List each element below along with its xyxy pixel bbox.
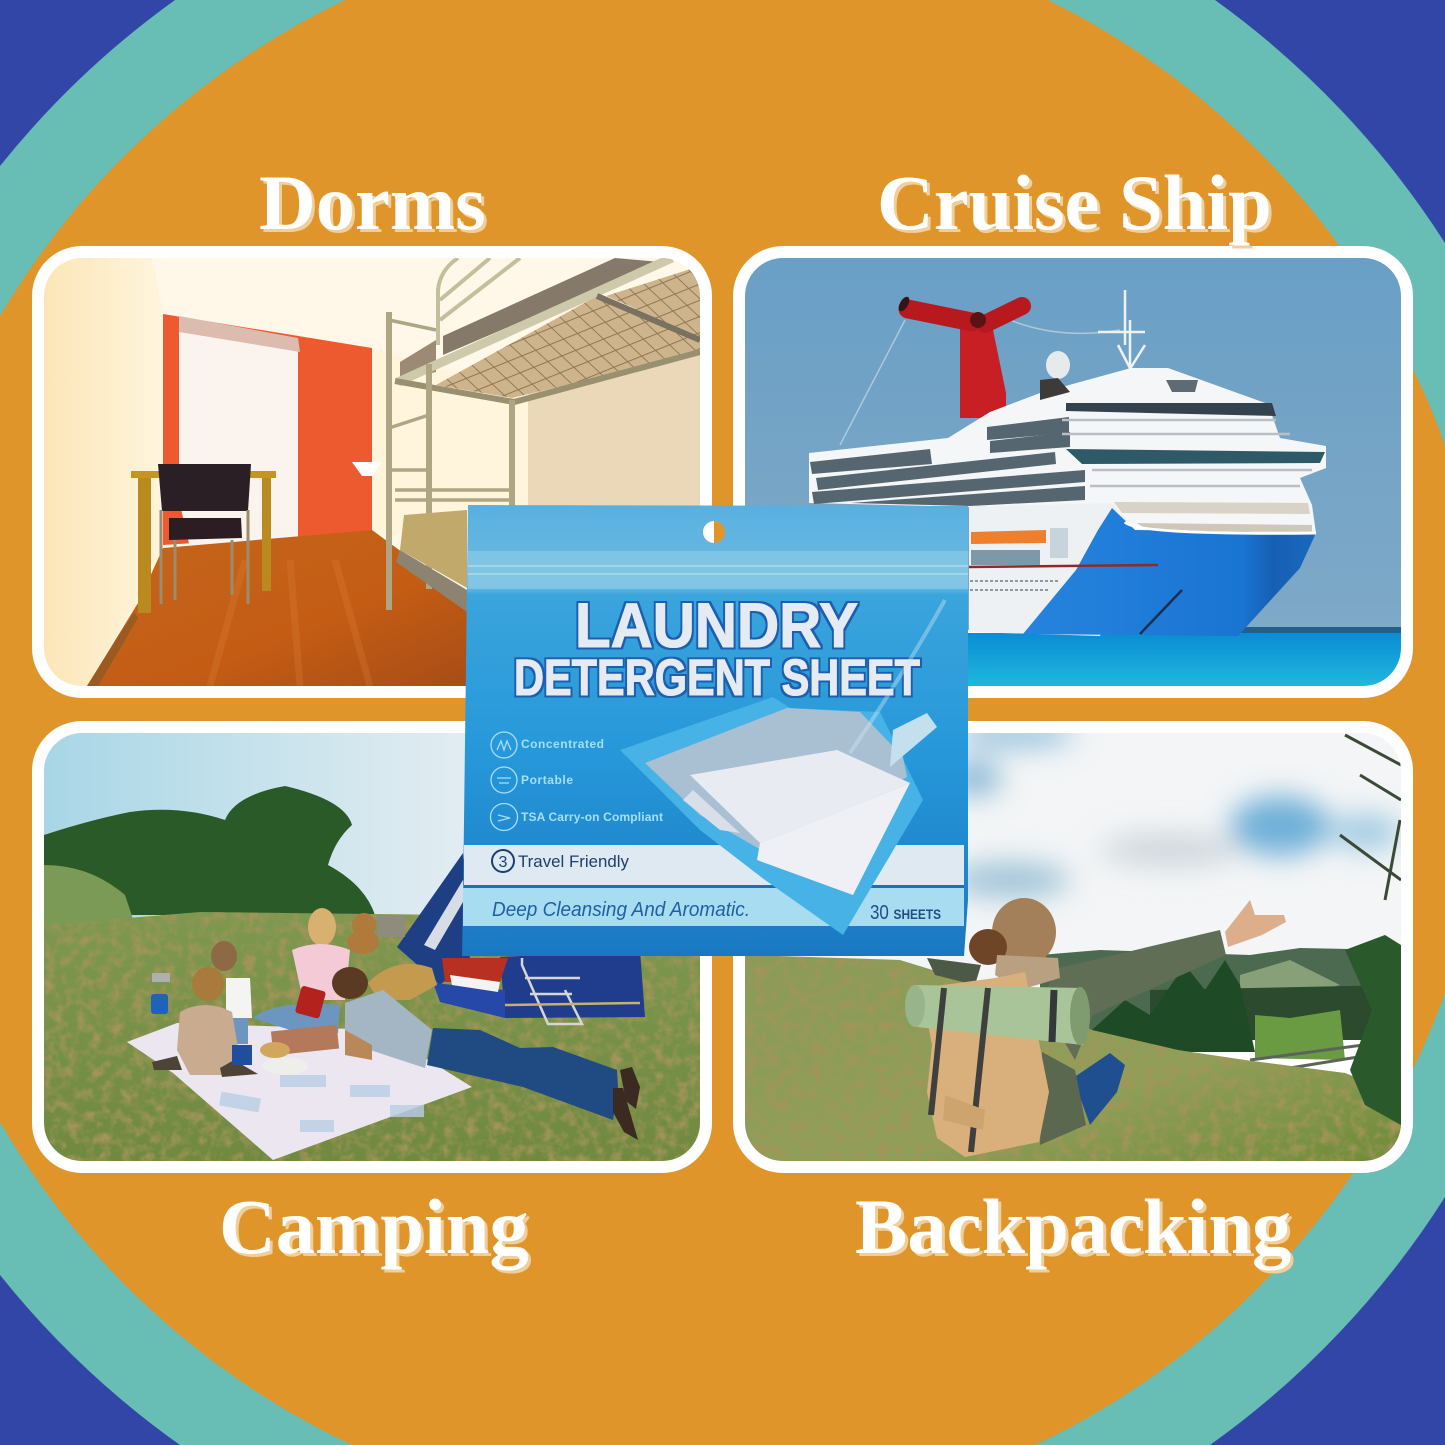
tagline: Deep Cleansing And Aromatic.: [492, 899, 750, 921]
camping stove: [151, 973, 170, 1014]
sky patches: [949, 723, 1401, 898]
bag title: [514, 591, 920, 706]
travel friendly line: [492, 850, 629, 872]
ship: [809, 290, 1326, 636]
feature list: [490, 732, 518, 830]
bunk bed: [389, 258, 700, 612]
product bag: Concentrated: [521, 737, 604, 751]
grass hillside: [745, 955, 1401, 1161]
heading: Camping: Camping: [219, 1183, 529, 1270]
heading: Cruise Ship: Cruise Ship: [877, 159, 1272, 246]
heading: Backpacking: Backpacking: [855, 1183, 1291, 1270]
backpack: [921, 972, 1049, 1157]
ship mast: [1098, 290, 1145, 372]
ship funnel: [897, 295, 1022, 418]
product bag: [462, 505, 968, 956]
tent: [397, 853, 645, 1024]
picnic blanket: [127, 1023, 472, 1160]
table: [131, 471, 276, 613]
product sheet window: [620, 600, 945, 935]
superstructure: [809, 368, 1326, 535]
mountains: [1040, 948, 1362, 1030]
travel friendly line: Travel Friendly: [518, 852, 629, 871]
family: [152, 908, 640, 1140]
grass: [44, 912, 700, 1161]
forest: [1092, 960, 1255, 1052]
heading: Dorms: Dorms: [259, 159, 486, 246]
light blue band: [463, 888, 964, 926]
basket and teddy: [347, 913, 437, 1000]
white hull: [969, 503, 1140, 636]
travel friendly line: 3: [499, 854, 508, 871]
bag title: DETERGENT SHEET: [514, 649, 920, 706]
white band: [464, 845, 964, 885]
bag title: LAUNDRY: [575, 591, 858, 661]
panel: backpacking photo: [733, 721, 1413, 1173]
sleeping mat: [905, 985, 1090, 1045]
panel: camping photo: [32, 721, 712, 1173]
blue hull: [1023, 508, 1316, 636]
sheet count: 30 SHEETS: [870, 902, 941, 924]
product bag: TSA Carry-on Compliant: [521, 810, 663, 824]
panel: cruise ship photo: [733, 246, 1413, 698]
product bag: Portable: [521, 773, 573, 787]
fir branches: [1340, 735, 1401, 1125]
trees: [44, 786, 375, 935]
panel: dorms photo: [32, 246, 712, 698]
chair: [158, 464, 251, 604]
hiker: [905, 898, 1286, 1157]
